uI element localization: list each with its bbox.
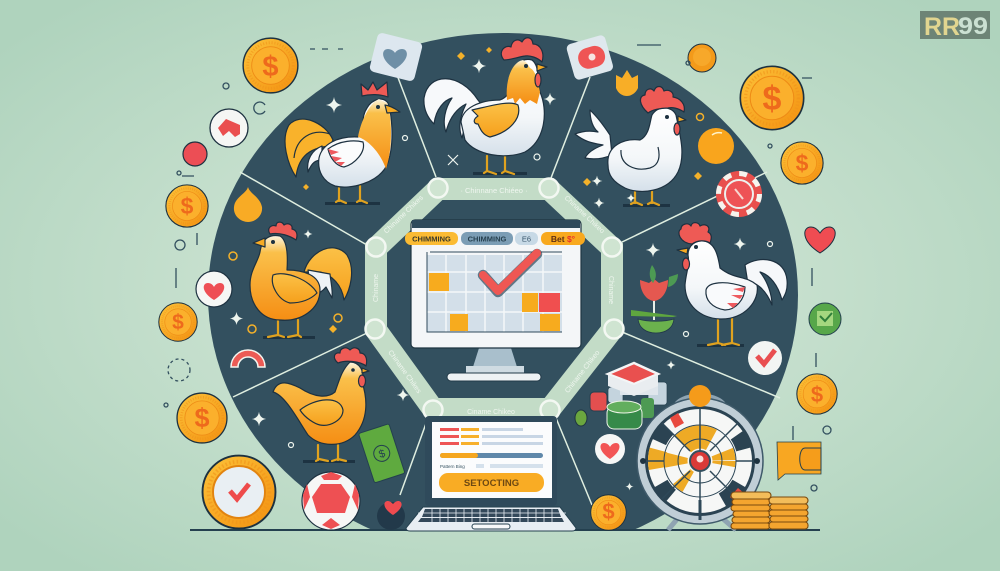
tab: blue <box>461 232 513 245</box>
coin: top left <box>243 38 298 93</box>
soccer ball <box>302 472 360 530</box>
coin: left 2 <box>159 303 197 341</box>
poker chips stacks <box>590 363 667 429</box>
chicken: bottom left <box>273 348 369 463</box>
poker chip <box>716 171 762 217</box>
heart bubble: top right <box>566 34 614 81</box>
wheel segments <box>672 433 728 489</box>
heart: right <box>805 227 835 253</box>
brand badge: 99 <box>958 13 988 40</box>
selecting button: SETOCTING <box>464 478 519 489</box>
wheel hub <box>690 451 710 471</box>
coin: left 3: $ <box>194 403 210 433</box>
chicken: top right <box>575 86 686 207</box>
coin: left 3 <box>177 393 227 443</box>
red check mark <box>483 253 537 292</box>
laptop screen <box>425 416 557 506</box>
monitor body <box>411 220 581 348</box>
tab: light <box>515 232 538 245</box>
wheel legs <box>668 518 736 530</box>
flame icon: top right <box>616 70 638 96</box>
band labels: Chiname <box>607 276 614 304</box>
wheel rim <box>637 398 763 524</box>
heart bubble: lower <box>595 434 625 464</box>
form rows <box>440 428 543 469</box>
heart near laptop <box>377 501 405 530</box>
chicken: top centre <box>424 38 547 175</box>
chevron badge <box>210 109 248 147</box>
tab: orange bet <box>541 232 585 245</box>
heart bubble: top left <box>369 32 423 82</box>
coin stacks <box>731 492 808 529</box>
sparkles and small marks <box>164 45 831 491</box>
coin: left 1: $ <box>181 193 194 219</box>
check badge: right <box>748 341 782 375</box>
coin: top left: $ <box>262 51 279 83</box>
coin: right: $ <box>796 150 809 176</box>
bottom ground line <box>190 529 820 531</box>
brand badge: RR <box>924 13 960 41</box>
heart badge: left <box>196 271 232 307</box>
coin: left 2: $ <box>172 311 184 334</box>
band labels <box>373 186 614 416</box>
coin: top right large <box>740 66 804 130</box>
coin: top right large: $ <box>763 80 782 118</box>
form rows: Pattern Bing <box>440 464 465 469</box>
coin: check badge <box>203 456 275 528</box>
wallet <box>777 442 821 480</box>
tab: yellow <box>405 232 458 245</box>
arch icon <box>231 350 265 367</box>
octagon band <box>376 189 612 409</box>
plant icon <box>631 265 678 333</box>
band labels: · Chinnane Chiéeo · <box>460 186 528 195</box>
band labels: Chiname Chikes <box>386 349 422 395</box>
calendar grid <box>427 252 562 332</box>
coin: bottom centre <box>591 495 626 530</box>
laptop base <box>406 507 576 531</box>
laptop <box>406 416 576 531</box>
roulette wheel <box>637 385 763 530</box>
tab: yellow: CHIMMING <box>412 234 451 244</box>
wheel knob <box>689 385 711 407</box>
octagon node circles <box>366 178 624 420</box>
band labels: Chiname Chikeo <box>564 349 602 395</box>
coin: right <box>781 142 823 184</box>
orange ball <box>698 128 734 164</box>
flame icon: left <box>234 187 262 222</box>
band labels: Chiname Chikes <box>383 194 425 235</box>
selecting button <box>439 473 544 492</box>
coin: lower right: $ <box>811 382 823 407</box>
coin: lower right <box>797 374 837 414</box>
tab: orange bet: Bet $° <box>551 234 576 244</box>
wheel pegs <box>640 458 646 464</box>
coin: left 1 <box>166 185 208 227</box>
centre monitor <box>405 220 585 381</box>
dark circular panel <box>208 33 798 557</box>
small green gem <box>575 410 587 426</box>
tab: light: E6 <box>522 234 531 244</box>
small orange coin <box>688 44 716 72</box>
band labels: Chiname Chikeo <box>563 195 605 235</box>
tab: blue: CHIMMING <box>468 234 507 244</box>
band labels: Chiname <box>373 274 380 302</box>
banknote <box>358 424 405 483</box>
red diamond badge <box>183 142 207 166</box>
coin: bottom centre: $ <box>602 499 615 524</box>
chicken: left <box>250 222 352 339</box>
green badge <box>809 303 841 335</box>
panel separators <box>233 75 780 505</box>
banknote: $ <box>377 448 387 461</box>
chicken: top left <box>285 82 400 205</box>
band labels: Ciname Chikeo <box>467 409 515 416</box>
monitor stand <box>473 348 517 367</box>
wheel bracket <box>675 396 725 408</box>
chicken: right <box>677 223 787 347</box>
brand badge <box>920 11 990 41</box>
